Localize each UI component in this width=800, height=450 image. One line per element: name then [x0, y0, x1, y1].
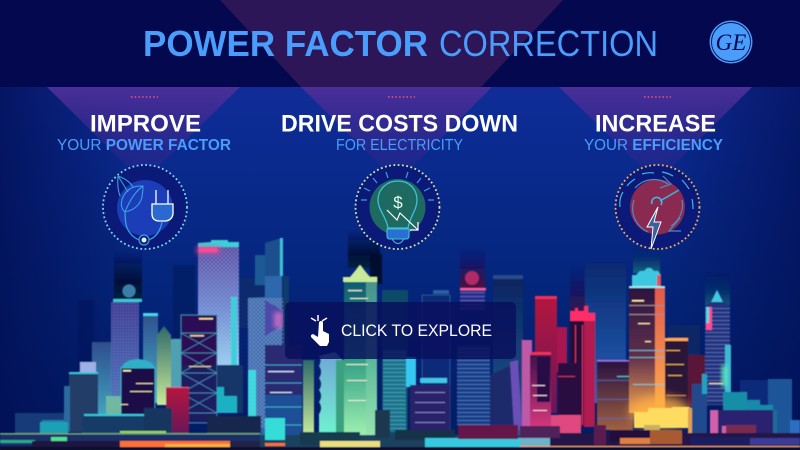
yellow glow — [630, 396, 694, 438]
orange skyscraper — [629, 247, 665, 413]
icon: pointing hand — [311, 315, 329, 346]
subheading: FOR ELECTRICITY — [336, 137, 463, 154]
ground centre — [260, 410, 520, 447]
blue grid building — [265, 345, 302, 437]
purple lined building — [410, 378, 450, 433]
panel: drive costs down — [281, 97, 518, 249]
subheading: YOUR EFFICIENCY — [584, 137, 723, 154]
panel: increase — [584, 97, 723, 249]
faceted lattice tower — [248, 238, 289, 440]
red towers — [535, 296, 595, 427]
tall lattice tower — [196, 240, 239, 368]
dots — [644, 96, 671, 98]
pink lit building — [530, 352, 581, 433]
subheading: YOUR POWER FACTOR — [57, 137, 231, 154]
dots — [131, 96, 158, 98]
heading: INCREASE — [595, 110, 716, 138]
stepped teal building — [217, 365, 243, 413]
distant buildings — [15, 255, 800, 438]
right spire tower — [705, 270, 731, 415]
light cones — [47, 87, 752, 182]
dark orange-edged building — [597, 360, 633, 430]
ground right — [520, 425, 800, 447]
central green tower — [343, 230, 382, 435]
grid building — [181, 315, 217, 423]
heading: DRIVE COSTS DOWN — [281, 110, 518, 138]
outlined blue building — [406, 290, 450, 440]
red building — [166, 387, 189, 433]
panel: improve — [57, 97, 231, 249]
skyline — [0, 230, 800, 450]
mint building — [303, 352, 344, 435]
crystal tower — [490, 340, 532, 430]
bottom edge — [0, 447, 800, 450]
heading: IMPROVE — [90, 110, 201, 138]
icon: gauge with lightning — [616, 165, 700, 249]
orange side building — [665, 338, 705, 414]
icon: light bulb with dollar — [356, 165, 440, 249]
dots — [388, 96, 415, 98]
left beam and sphere — [114, 250, 142, 302]
GE logo — [710, 20, 752, 64]
right low buildings — [692, 374, 777, 435]
ground left — [0, 408, 261, 447]
teal lined building — [383, 350, 406, 432]
header band — [0, 0, 800, 87]
title — [143, 23, 658, 64]
GE logo: GE — [716, 30, 746, 55]
title: POWER FACTOR — [143, 23, 428, 64]
title: CORRECTION — [439, 23, 658, 64]
dome building — [120, 359, 155, 430]
icon: light bulb with dollar: $ — [393, 193, 403, 212]
click to explore button — [285, 302, 516, 359]
button label: CLICK TO EXPLORE — [341, 321, 492, 340]
left towers — [64, 299, 181, 432]
pink beacon tower — [457, 247, 490, 425]
icon: leaf and plug — [103, 165, 187, 249]
